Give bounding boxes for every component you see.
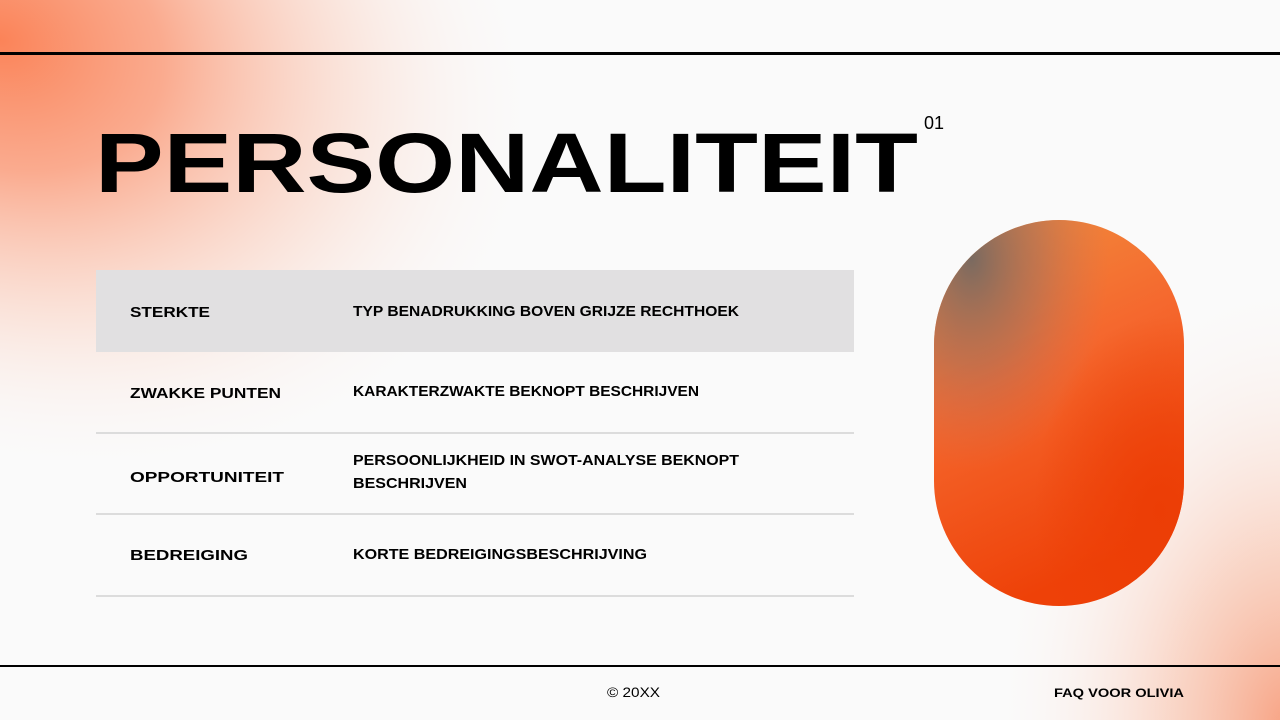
table: KORTE BEDREIGINGSBESCHRIJVING [353,546,647,563]
table: ZWAKKE PUNTEN [130,385,281,402]
table: STERKTE [130,304,210,321]
table: BESCHRIJVEN [353,475,467,492]
superscript number: 01 [924,113,944,133]
table: PERSOONLIJKHEID IN SWOT-ANALYSE BEKNOPT [353,452,739,469]
table [96,270,854,597]
gradient pill [934,220,1184,606]
footer copyright: © 20XX [607,684,661,700]
title: PERSONALITEIT [95,116,918,210]
footer label: FAQ VOOR OLIVIA [1054,686,1184,700]
table: KARAKTERZWAKTE BEKNOPT BESCHRIJVEN [353,383,699,400]
table: TYP BENADRUKKING BOVEN GRIJZE RECHTHOEK [353,303,739,320]
table: BEDREIGING [130,547,248,564]
table: OPPORTUNITEIT [130,469,284,486]
